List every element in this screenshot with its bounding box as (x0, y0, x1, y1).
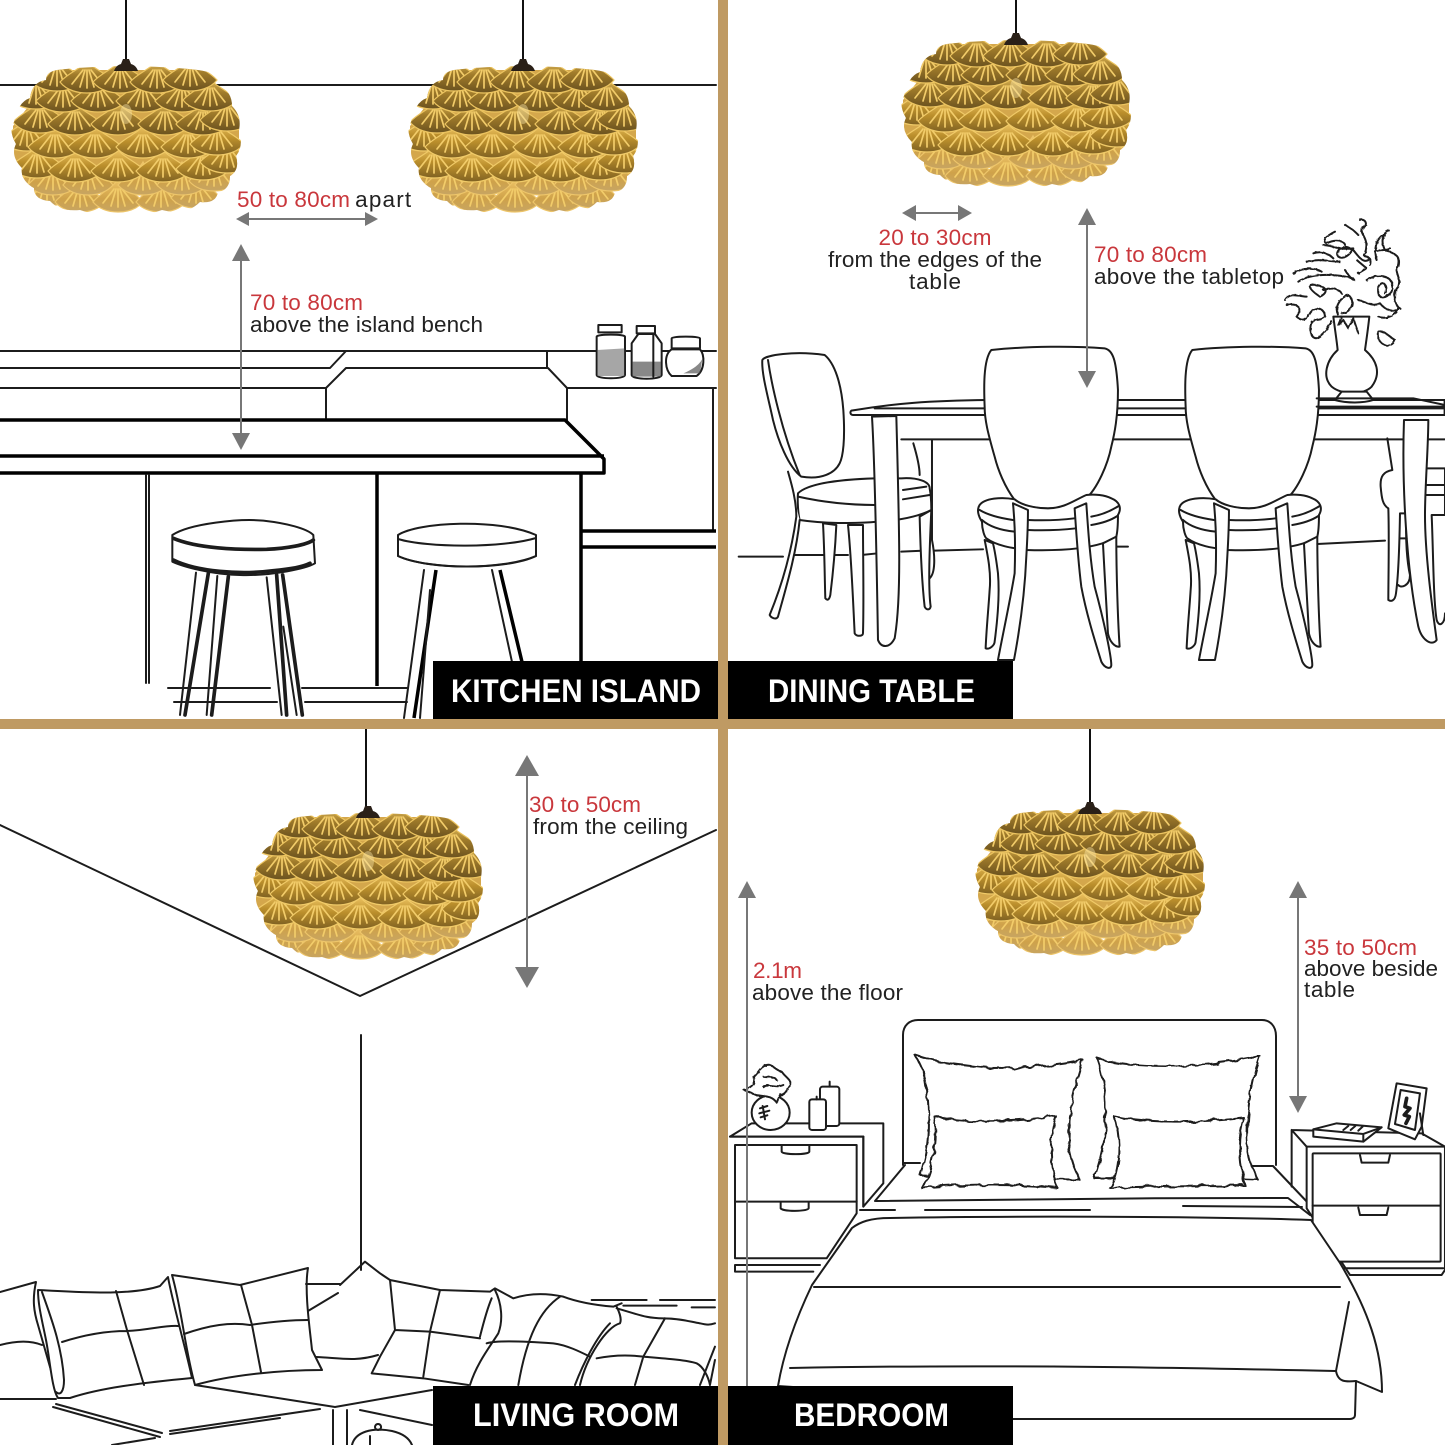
text: tabletop (1094, 242, 1284, 289)
table leg and far chair (1317, 420, 1445, 643)
panel: living room (0, 728, 716, 1445)
text: apart: 50 to 80cmapart (237, 187, 412, 212)
text: above bench (250, 290, 483, 337)
left nightstand (730, 1065, 883, 1272)
lamp (964, 728, 1218, 955)
text: floor: 2.1m (753, 958, 802, 983)
text: ceiling (529, 792, 688, 839)
text: beside table: above beside (1304, 956, 1438, 981)
room lines (0, 825, 716, 1270)
text: floor: above the floor (752, 980, 904, 1005)
dining line drawing (739, 220, 1445, 668)
label: living room (433, 1386, 718, 1445)
middle chair (978, 347, 1120, 668)
right nightstand (1292, 1083, 1445, 1275)
text: above bench: above the island bench (250, 312, 483, 337)
panel: bedroom (730, 728, 1445, 1445)
panel: kitchen island (0, 0, 716, 718)
arrow vertical bench (232, 244, 250, 450)
arrow horizontal apart (236, 212, 378, 226)
jars (597, 325, 703, 379)
text: floor (752, 958, 904, 1005)
label: kitchen island: KITCHEN ISLAND (451, 673, 701, 709)
kitchen island line drawing (0, 85, 716, 718)
text: above bench: 70 to 80cm (250, 290, 363, 315)
label: dining table (728, 661, 1013, 719)
sofa (0, 1262, 715, 1445)
lamp (890, 0, 1144, 186)
label: living room: LIVING ROOM (473, 1397, 679, 1433)
table, floor and left chair (739, 353, 1445, 646)
panel: dining table (739, 220, 1445, 668)
text: tabletop: 70 to 80cm (1094, 242, 1207, 267)
text: beside table: 35 to 50cm (1304, 935, 1417, 960)
stool left (172, 520, 315, 715)
text: edges: from the edges of the (828, 247, 1042, 272)
text: edges: table (909, 269, 961, 294)
text: beside table: table (1304, 977, 1355, 1002)
text: tabletop: above the tabletop (1094, 264, 1284, 289)
arrow vertical beside table (1289, 881, 1307, 1113)
left chair (762, 353, 844, 478)
teapot (352, 1424, 412, 1445)
vase and flowers (1285, 220, 1445, 407)
arrow vertical ceiling (515, 755, 539, 988)
lamp left (0, 0, 254, 212)
text: edges: 20 to 30cm (878, 225, 992, 250)
label: bedroom: BEDROOM (794, 1397, 949, 1433)
text: ceiling: from the ceiling (533, 814, 688, 839)
headboard (903, 1020, 1310, 1205)
label: dining table: DINING TABLE (768, 673, 975, 709)
label: bedroom (728, 1386, 1013, 1445)
arrow vertical tabletop (1078, 208, 1096, 388)
bed (778, 1165, 1382, 1419)
third chair (1179, 347, 1321, 668)
label: kitchen island (433, 661, 718, 719)
text: edges (828, 225, 1042, 294)
lamp (242, 728, 496, 959)
arrow horizontal edges (902, 205, 972, 221)
lamp right (397, 0, 651, 212)
text: beside table (1304, 935, 1438, 1002)
stool right (398, 524, 536, 718)
text: ceiling: 30 to 50cm (529, 792, 641, 817)
floor lines (168, 688, 407, 702)
arrow vertical floor (738, 881, 756, 1445)
pillows (915, 1055, 1260, 1188)
